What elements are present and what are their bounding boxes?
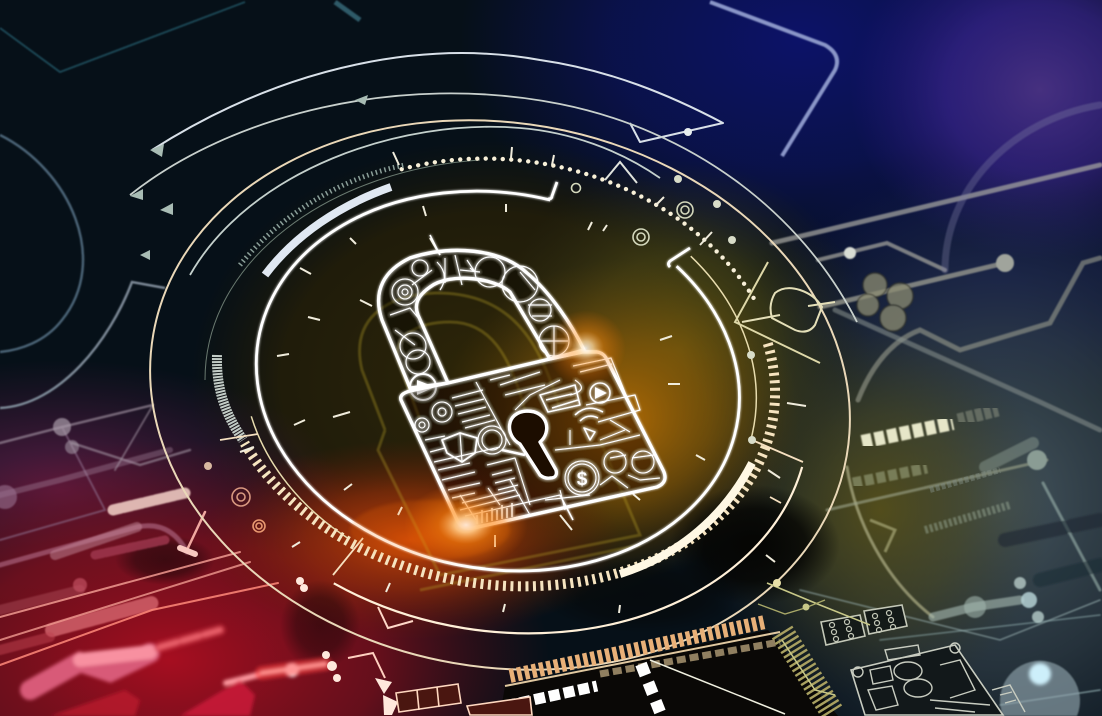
padlock — [379, 235, 665, 528]
fourth arc — [190, 127, 660, 275]
small bright dots by the red traces — [296, 577, 398, 715]
blurred background traces, upper left and top right — [0, 2, 837, 408]
microchip board — [396, 520, 1025, 716]
left fine ticks — [240, 165, 405, 265]
concentric rings — [106, 53, 894, 716]
bottom notch — [378, 607, 413, 628]
lock body — [401, 352, 665, 528]
thin second ring — [233, 186, 781, 605]
lock icons — [415, 358, 660, 524]
shackle — [379, 250, 584, 388]
main inner ring — [226, 154, 770, 608]
outermost arc with arrow — [152, 53, 723, 150]
rounded tag — [771, 288, 822, 332]
left grey segment — [217, 355, 243, 440]
tag line — [742, 302, 835, 322]
large outer ellipse — [106, 66, 894, 716]
blurred padlock echo — [360, 293, 640, 590]
triangle marker — [735, 262, 820, 363]
dotted upper ring — [390, 140, 771, 299]
ring nodes — [130, 95, 756, 532]
ring with right end and bottom sweep — [330, 390, 802, 681]
tick marks — [240, 147, 806, 613]
diagonal notch — [220, 434, 803, 575]
antenna lines — [430, 235, 573, 520]
right side traces — [772, 105, 1100, 705]
right side beads and nodes — [844, 247, 1080, 716]
light blue bar — [265, 187, 391, 275]
lens flares — [350, 310, 626, 567]
second arc — [130, 93, 857, 322]
small chevron — [605, 162, 637, 183]
lock icons: $ — [577, 469, 588, 490]
lower left red circuit shapes — [30, 630, 325, 716]
left side traces over red — [0, 405, 278, 665]
keyhole — [510, 411, 556, 478]
shackle icons — [390, 255, 569, 400]
cream bar — [620, 463, 752, 574]
right tick ring — [227, 257, 786, 629]
left short arc — [205, 160, 480, 380]
